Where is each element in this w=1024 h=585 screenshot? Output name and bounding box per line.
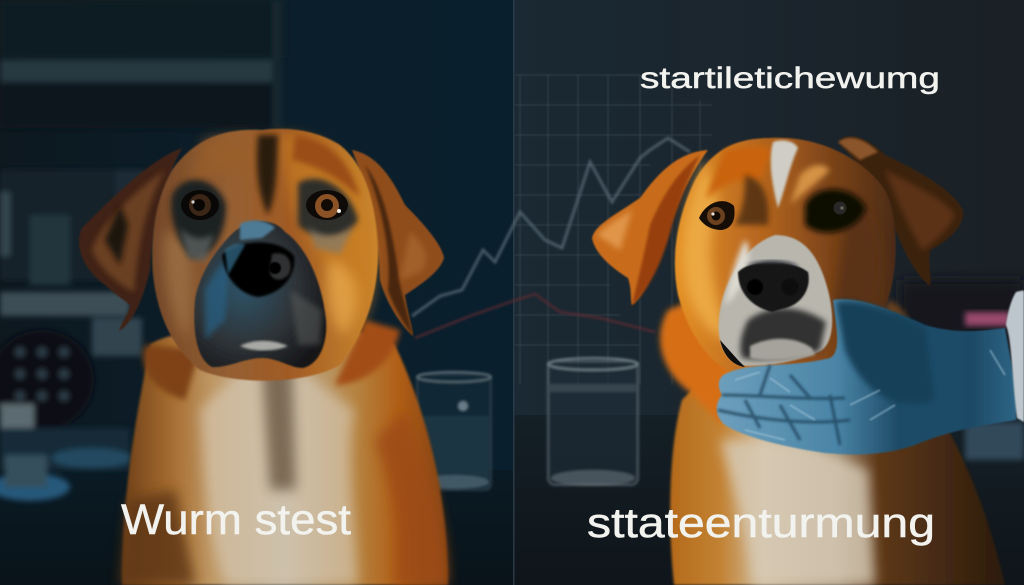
icon: gloved hand (717, 299, 1017, 454)
panel: right background laboratory (513, 0, 1024, 585)
text: left caption: Wurm stest (121, 496, 351, 544)
left ear (79, 148, 182, 331)
icon: left dog eye (181, 190, 219, 220)
muzzle (719, 235, 832, 366)
icon: right dog nose (738, 262, 809, 312)
icon: right dog eye (306, 190, 348, 220)
icon: left dog eye (699, 201, 735, 230)
icon: right beaker (548, 358, 638, 486)
panel: left background laboratory (0, 0, 513, 585)
right ear (352, 150, 444, 336)
right ear (838, 137, 963, 286)
left ear (592, 150, 708, 305)
text: top right label: startiletichewumg (640, 62, 940, 95)
shelves (0, 0, 285, 356)
chart: background grid and line chart (412, 75, 712, 385)
panel: left dog (79, 129, 448, 585)
face (152, 129, 378, 381)
text: right caption: sttateenturmung (587, 499, 935, 546)
icon: lab coat sleeve (1006, 290, 1024, 422)
panel: right dog (592, 137, 1005, 585)
dog body (660, 295, 1005, 585)
forehead stripe (257, 135, 278, 215)
face (675, 138, 896, 379)
lab equipment (0, 330, 132, 501)
icon: left beaker (417, 372, 491, 490)
muzzle (194, 222, 326, 368)
eye shadow left (171, 180, 226, 258)
dog body (120, 320, 448, 585)
icon: left dog nose (222, 242, 294, 297)
eye shadow right (298, 179, 358, 237)
icon: right dog eye shadowed (805, 189, 866, 233)
